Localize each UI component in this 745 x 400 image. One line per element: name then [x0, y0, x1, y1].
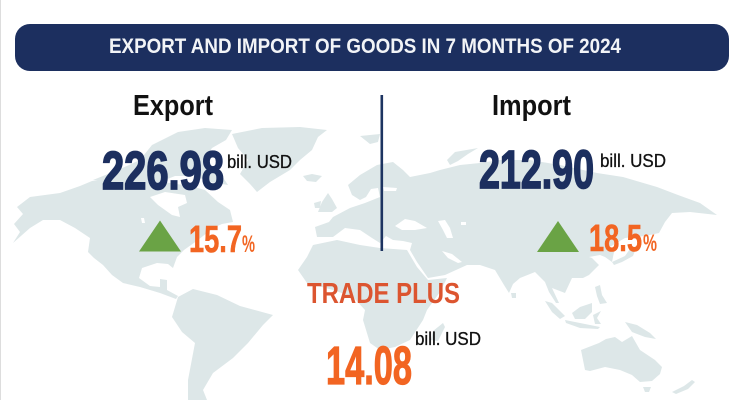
- map: New Zealand: [672, 380, 695, 394]
- icon: import up triangle: [537, 221, 579, 252]
- trade plus value: 14.08: [326, 336, 412, 396]
- title text: EXPORT AND IMPORT OF GOODS IN 7 MONTHS OF 2024: [109, 35, 621, 58]
- map: Japan: [612, 246, 636, 265]
- vertical divider: [380, 95, 383, 251]
- map: British Isles: [314, 193, 337, 212]
- export unit: bill. USD: [227, 152, 292, 172]
- map: Africa: [298, 240, 447, 350]
- trade plus block: [307, 278, 481, 396]
- title banner: [15, 24, 729, 71]
- map: Sri Lanka: [511, 293, 516, 298]
- map: Sakhalin: [658, 213, 664, 226]
- map: Philippines: [595, 285, 607, 304]
- trade plus unit: bill. USD: [415, 329, 481, 349]
- export growth: 15.7: [189, 219, 242, 261]
- map: Novaya Zemlya: [447, 148, 478, 165]
- map: Sumatra: [545, 301, 565, 319]
- import percent sign: %: [643, 230, 657, 257]
- map: Madagascar: [431, 323, 445, 341]
- import value: 212.90: [479, 140, 594, 200]
- export heading: Export: [133, 90, 213, 122]
- map: Iceland: [303, 174, 322, 182]
- map: Java: [565, 320, 600, 329]
- import column: [479, 90, 666, 260]
- export value: 226.98: [102, 141, 224, 201]
- map: Svalbard: [360, 134, 380, 144]
- map: Sulawesi: [593, 311, 601, 324]
- import growth: 18.5: [589, 218, 642, 260]
- map: North America: [13, 176, 233, 299]
- map: Greenland: [232, 127, 327, 192]
- import unit: bill. USD: [600, 151, 666, 171]
- world map background: [13, 127, 717, 400]
- import heading: Import: [492, 90, 571, 122]
- map: Eurasia: [315, 160, 717, 303]
- map: Arctic islands: [93, 128, 232, 185]
- map: Borneo: [572, 303, 592, 319]
- map: New Guinea: [625, 322, 656, 339]
- map: Australia: [581, 336, 662, 382]
- export percent sign: %: [242, 231, 255, 258]
- map: inland seas: [141, 187, 466, 263]
- export column: [102, 90, 292, 261]
- trade plus heading: TRADE PLUS: [307, 278, 460, 310]
- map: South America: [172, 289, 273, 400]
- icon: export up triangle: [139, 220, 181, 252]
- map: Tasmania: [643, 387, 651, 392]
